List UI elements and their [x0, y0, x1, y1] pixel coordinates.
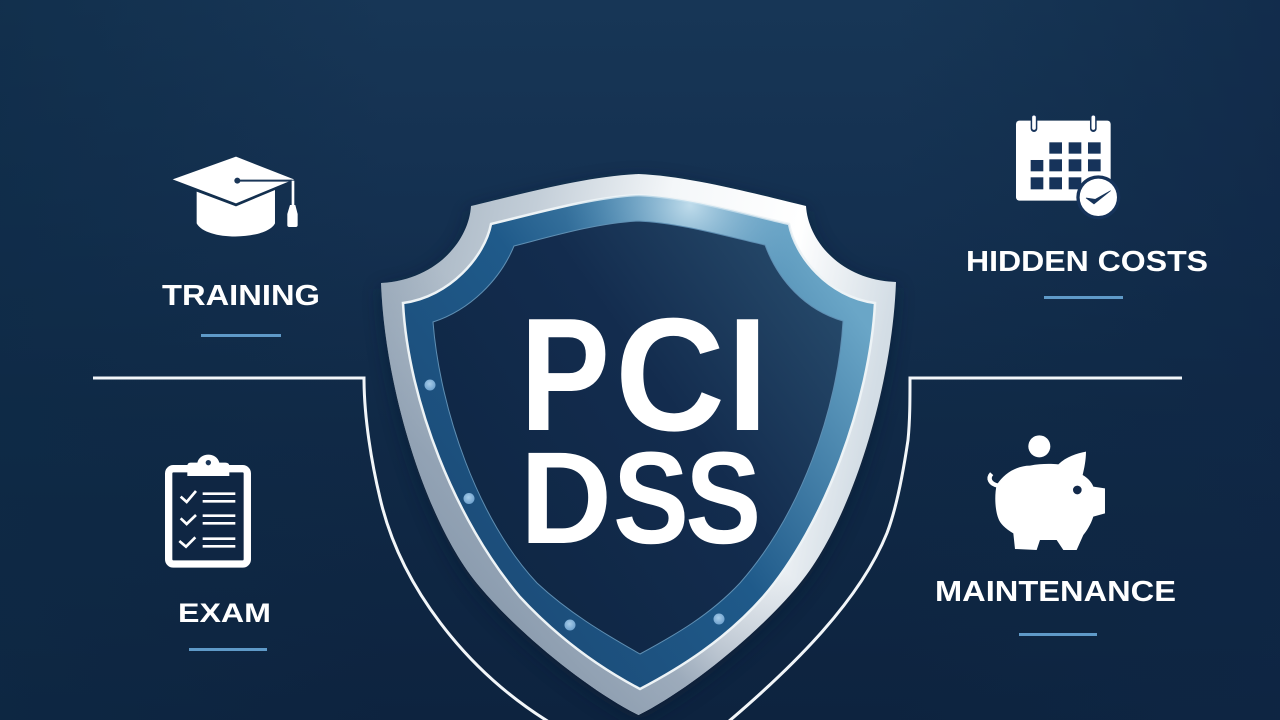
title: PCI	[520, 285, 768, 465]
icon: clipboard checklist	[169, 455, 247, 564]
underline: hidden costs	[1044, 296, 1123, 299]
underline: exam	[189, 648, 267, 651]
label: hidden costs: HIDDEN COSTS	[966, 246, 1208, 278]
icon: graduation cap	[173, 157, 298, 236]
shield inner dark field	[433, 221, 843, 654]
title: DSS: S	[613, 424, 689, 571]
underline: maintenance	[1019, 633, 1097, 636]
title: DSS: D	[520, 424, 612, 571]
right connector line	[728, 378, 1182, 720]
title: PCI: P	[520, 285, 610, 465]
rivets	[424, 380, 724, 630]
underline: training	[201, 334, 281, 337]
icon: piggy bank	[990, 435, 1105, 550]
label: exam: EXAM	[178, 598, 271, 628]
left connector line	[93, 378, 549, 720]
shield outer silver rim	[381, 174, 896, 715]
title: PCI: C	[615, 285, 725, 465]
title: PCI: I	[727, 285, 768, 465]
shield blue band with white edge	[403, 195, 875, 689]
icon: calendar with check	[1016, 117, 1120, 219]
shield rim lower shading	[381, 174, 896, 715]
shield	[381, 174, 896, 720]
label: maintenance: MAINTENANCE	[935, 576, 1176, 608]
title: DSS	[520, 424, 761, 571]
checklist marks	[179, 491, 235, 547]
label: training: TRAINING	[162, 280, 320, 312]
title: DSS: S	[685, 424, 761, 571]
shield band highlight	[403, 195, 875, 689]
